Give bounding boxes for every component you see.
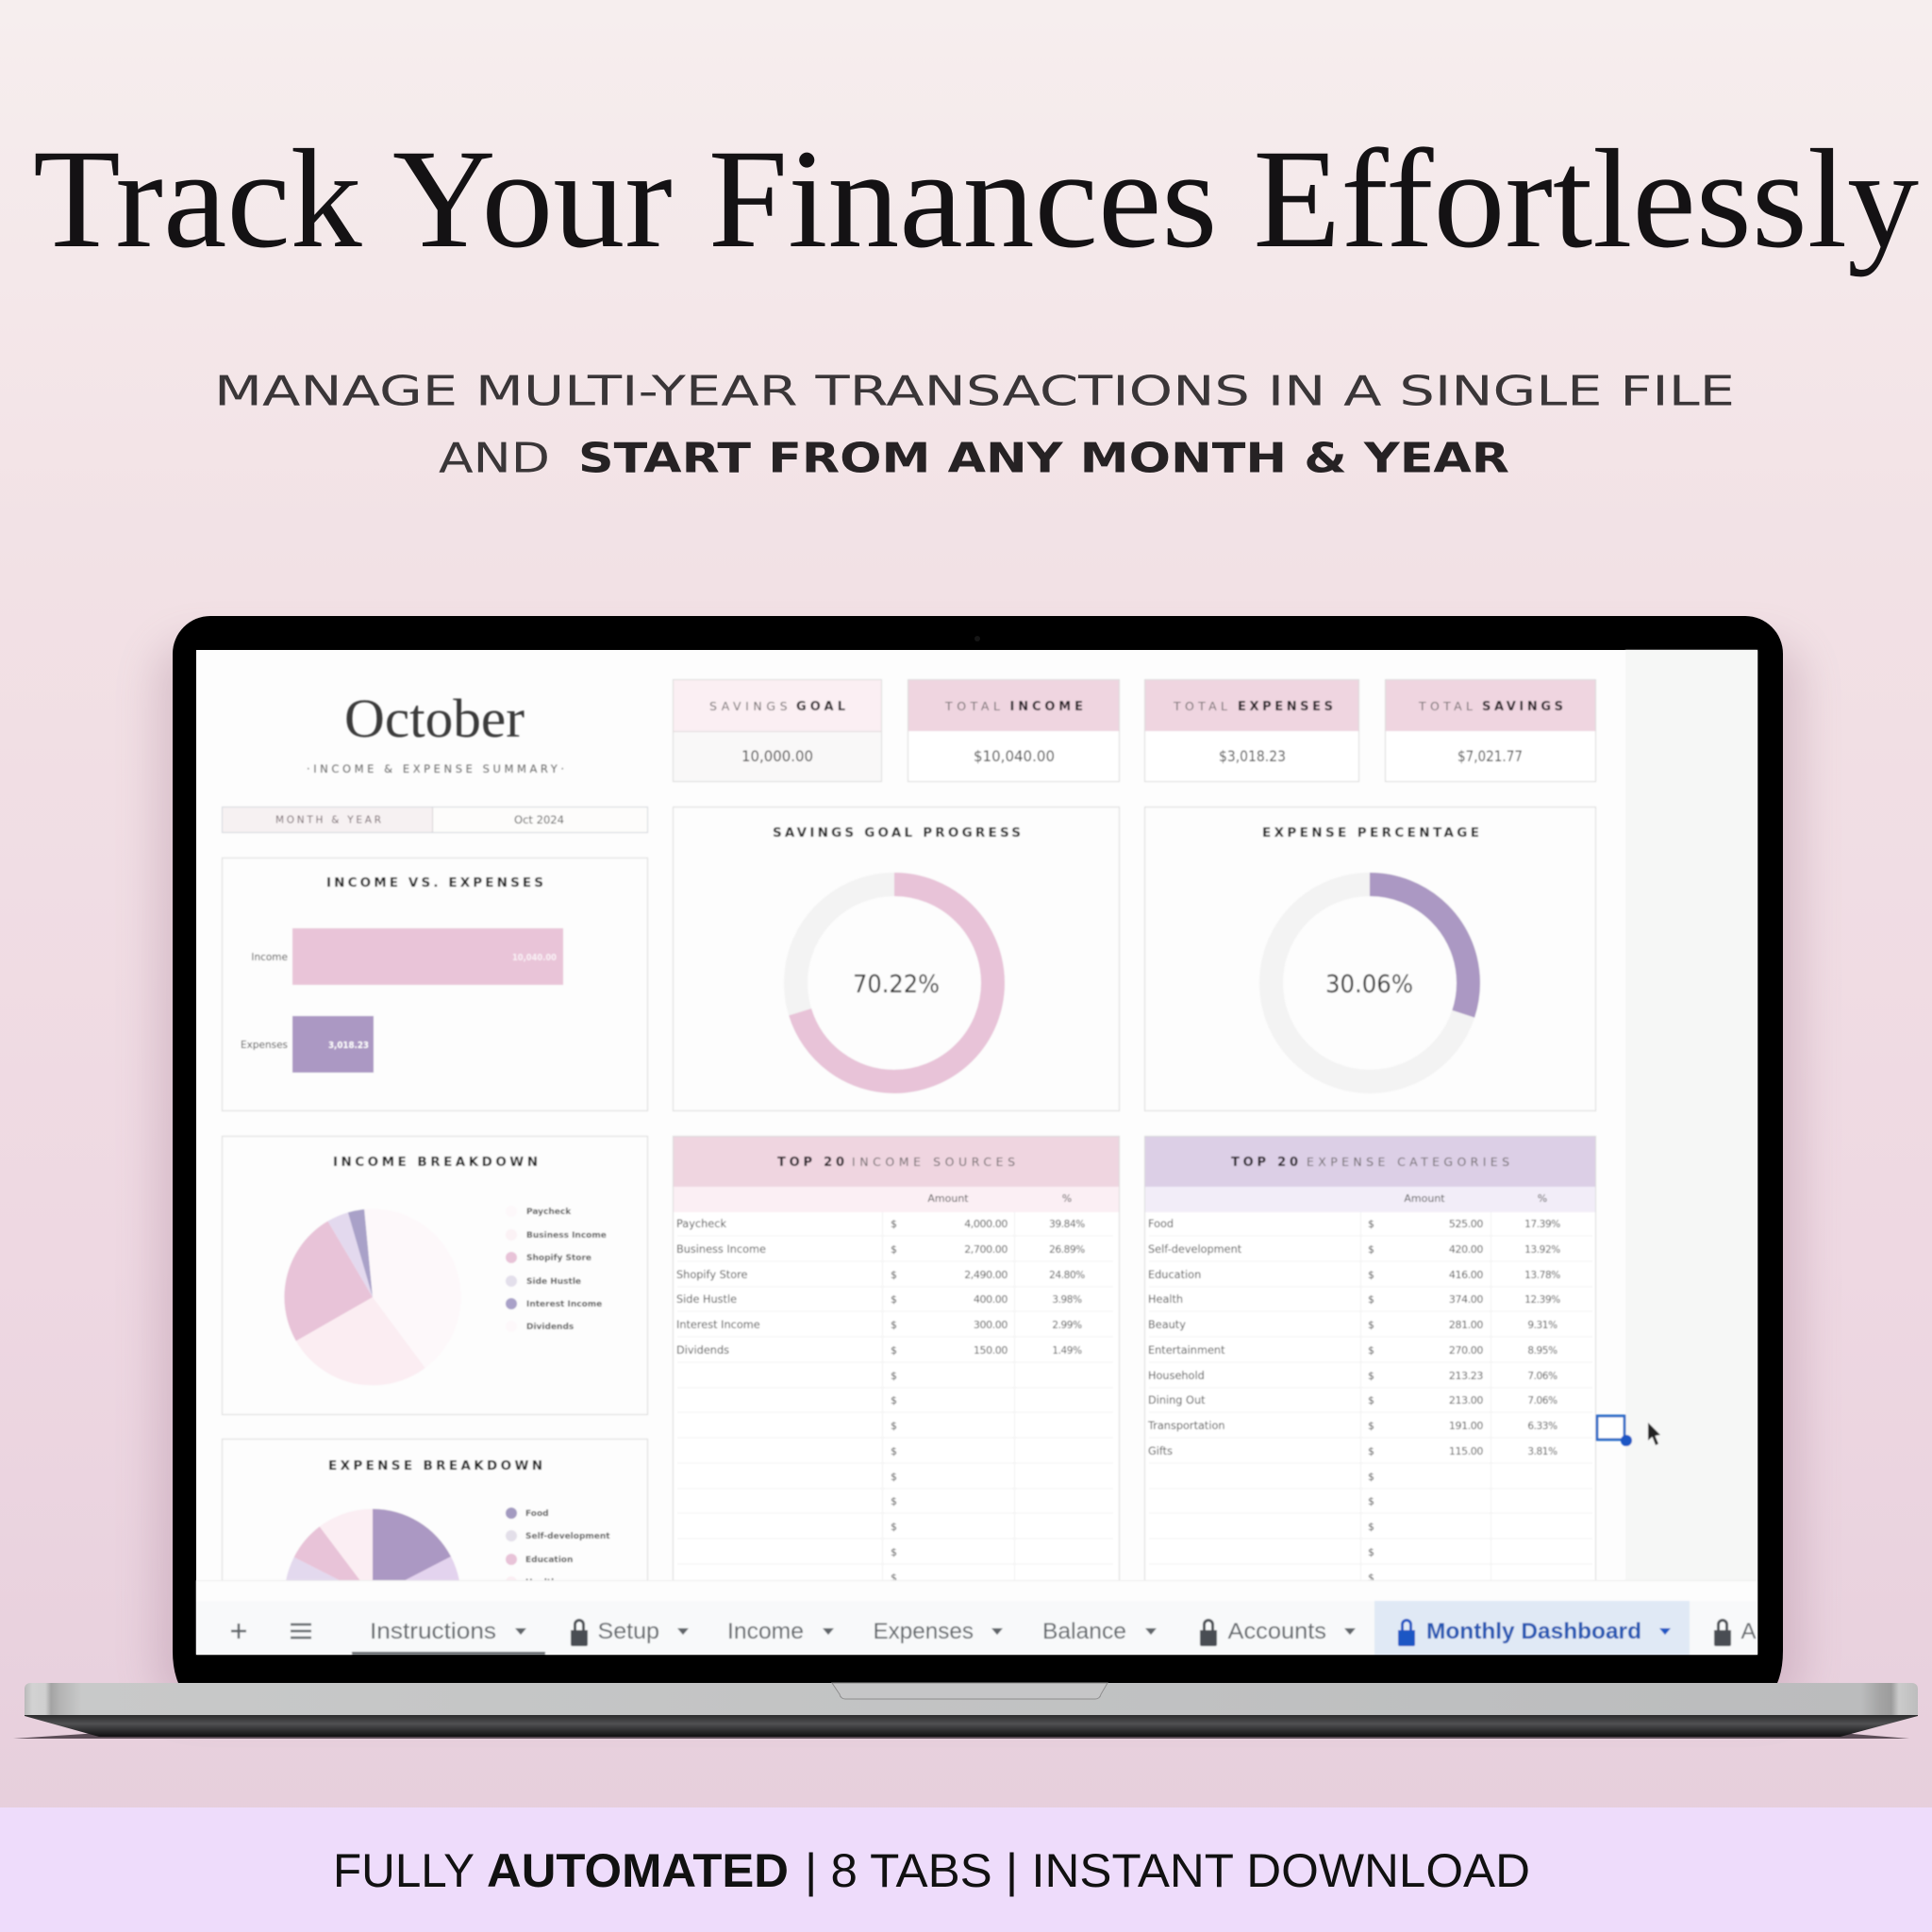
income rows: $ [891,1495,897,1507]
month heading [307,697,564,774]
table header [674,1137,1119,1187]
expense rows: $ [1368,1394,1374,1407]
expense rows: Transportation [1147,1420,1225,1432]
base ground shadow [13,1733,1909,1739]
income rows: 2.99% [1052,1320,1082,1331]
income rows: Interest Income [676,1319,760,1331]
expense rows: 191.00 [1449,1420,1483,1432]
legend: income: Interest Income [526,1300,602,1309]
expense rows: $ [1368,1218,1374,1230]
income rows: Dividends [676,1344,729,1357]
table: top 20 expense categories: EXPENSE CATEGORIES [1307,1155,1509,1169]
expense rows: Self-development [1148,1243,1242,1256]
expense rows: $ [1368,1370,1374,1382]
camera [974,636,980,641]
income rows: $ [891,1344,897,1357]
KPI card: total income: TOTAL [944,699,1000,713]
month and year selector: Oct 2024 [514,813,564,826]
legend: expenses: Education [525,1556,573,1565]
legend: income: Shopify Store [526,1254,591,1263]
expense rows: Health [1148,1293,1183,1306]
subtitle: START FROM ANY MONTH & YEAR [578,434,1509,483]
panel: savings goal progress [674,808,1119,1111]
tab: monthly dashboard (active): Monthly Dashboard [1426,1619,1641,1644]
tab: setup [571,1619,689,1646]
expense rows: 7.06% [1527,1395,1557,1407]
expense rows: $ [1368,1546,1374,1558]
KPI card: savings goal [674,679,881,781]
tab: instructions [352,1619,545,1655]
expense rows: 374.00 [1449,1293,1483,1306]
tab: setup: Setup [598,1619,659,1644]
income rows: 39.84% [1049,1219,1085,1230]
income rows: $ [891,1445,897,1457]
tab: monthly dashboard (active) [1374,1601,1690,1655]
panel: income breakdown [223,1136,647,1415]
expense rows [1147,1218,1560,1584]
tab: accounts [1200,1619,1356,1646]
expense rows: $ [1368,1495,1374,1507]
tab: clipped annual tab: A [1741,1619,1757,1644]
donut chart: 30.06% [1272,885,1468,1081]
KPI card: total expenses: $3,018.23 [1219,747,1286,765]
base notch [832,1683,1108,1699]
banner text: | 8 TABS | INSTANT DOWNLOAD [805,1844,1530,1897]
expense rows: 3.81% [1527,1446,1557,1457]
income rows: 1.49% [1052,1345,1082,1357]
income rows: $ [891,1471,897,1483]
income rows: $ [891,1269,897,1281]
KPI card: total expenses: TOTAL [1173,699,1227,713]
tab: clipped annual tab [1714,1619,1757,1646]
panel: income breakdown: INCOME BREAKDOWN [333,1155,538,1170]
income rows: 4,000.00 [964,1218,1008,1230]
panel: expense percentage: EXPENSE PERCENTAGE [1262,825,1479,841]
income rows: $ [891,1521,897,1533]
month heading: ·INCOME & EXPENSE SUMMARY· [307,762,564,775]
expense rows: 12.39% [1524,1294,1560,1306]
expense rows: 17.39% [1524,1219,1560,1230]
sheet tab bar [196,1580,1757,1655]
KPI card: total income: INCOME [1009,700,1083,714]
table: top 20 income sources: INCOME SOURCES [852,1155,1015,1169]
panel: income vs expenses [223,858,647,1111]
bar: expenses: 3,018.23 [328,1041,369,1051]
expense rows: $ [1368,1471,1374,1483]
income rows: $ [891,1218,897,1230]
table: top 20 income sources: TOP 20 [777,1156,844,1170]
tab: expenses: Expenses [874,1619,974,1644]
income rows: $ [891,1243,897,1256]
expense rows: $ [1368,1420,1374,1432]
expense rows: 281.00 [1449,1319,1483,1331]
bar: expenses [241,1016,374,1073]
expense rows: $ [1368,1344,1374,1357]
tab: income: Income [727,1619,804,1644]
expense rows: 7.06% [1527,1371,1557,1382]
expense rows: 115.00 [1449,1445,1483,1457]
panel: income vs expenses: INCOME VS. EXPENSES [326,875,543,891]
KPI card: total savings [1385,679,1596,781]
income rows: $ [891,1319,897,1331]
KPI card: total income: $10,040.00 [974,747,1055,765]
income rows [676,1218,1085,1584]
table: top 20 expense categories [1145,1136,1596,1598]
icon: add sheet [231,1624,246,1639]
KPI card: savings goal: GOAL [796,700,845,714]
expense rows: $ [1368,1293,1374,1306]
legend: income: Paycheck [526,1208,572,1217]
income rows: $ [891,1370,897,1382]
income rows: $ [891,1394,897,1407]
expense rows: 420.00 [1449,1243,1483,1256]
KPI card: total expenses: EXPENSES [1238,700,1333,714]
icon: all sheets menu [291,1624,311,1638]
donut chart: 70.22% [796,885,992,1081]
screen [196,650,1757,1655]
expense rows: 13.78% [1524,1270,1560,1281]
month and year selector [223,808,647,832]
legend: expenses [506,1507,610,1588]
expense rows: 6.33% [1527,1421,1557,1432]
KPI card: total savings: $7,021.77 [1457,747,1523,765]
table: top 20 income sources [674,1136,1119,1598]
expense rows: 9.31% [1527,1320,1557,1331]
expense rows: 270.00 [1449,1344,1483,1357]
expense rows: 213.23 [1449,1370,1483,1382]
expense rows: $ [1368,1572,1374,1584]
income rows: 150.00 [974,1344,1008,1357]
bar: expenses: Expenses [241,1040,288,1051]
income rows: 24.80% [1049,1270,1085,1281]
laptop mockup [13,616,1918,1739]
right empty sheet area [1625,650,1757,1580]
month and year selector: MONTH & YEAR [275,815,381,826]
expense rows: Gifts [1148,1445,1173,1457]
subtitle [214,368,1735,483]
KPI card: total income [908,679,1119,781]
bar: income [251,928,563,985]
income rows: $ [891,1572,897,1584]
panel: expense breakdown: EXPENSE BREAKDOWN [328,1458,542,1474]
laptop shadow [156,641,1802,1707]
income rows: Paycheck [676,1218,726,1230]
expense rows: 213.00 [1449,1394,1483,1407]
expense rows: $ [1368,1269,1374,1281]
legend: income [506,1206,607,1332]
tab: income [727,1619,834,1644]
banner text: AUTOMATED [487,1844,789,1897]
pie chart: expenses [286,1507,459,1581]
KPI card: savings goal: 10,000.00 [741,747,813,765]
subtitle: MANAGE MULTI-YEAR TRANSACTIONS IN A SINGLE FILE [214,368,1735,415]
expense rows: 416.00 [1449,1269,1483,1281]
income rows: 300.00 [974,1319,1008,1331]
banner text: FULLY [333,1844,475,1897]
expense rows: $ [1368,1319,1374,1331]
table: top 20 income sources: Amount [927,1192,969,1205]
income rows: $ [891,1420,897,1432]
income rows: 26.89% [1049,1244,1085,1256]
legend: expenses: Health [525,1578,558,1588]
KPI card: total savings: SAVINGS [1482,700,1563,714]
expense rows: $ [1368,1243,1374,1256]
expense rows: 13.92% [1524,1244,1560,1256]
bar: income: 10,040.00 [512,953,557,963]
income rows: Business Income [676,1243,766,1256]
KPI card: total expenses [1145,679,1358,781]
pie chart: income [283,1208,425,1385]
expense rows: 8.95% [1527,1345,1557,1357]
tab: balance: Balance [1042,1619,1126,1644]
legend: income: Business Income [526,1231,607,1241]
table header [1145,1137,1595,1187]
panel: expense percentage [1145,808,1596,1111]
KPI card: total savings: TOTAL [1418,699,1473,713]
laptop bezel [173,616,1783,1683]
income rows: 400.00 [974,1293,1008,1306]
income rows: Side Hustle [676,1293,737,1306]
subtitle: AND [439,434,550,483]
expense rows: Household [1148,1370,1205,1382]
panel: expense breakdown [221,1438,649,1581]
income rows: $ [891,1546,897,1558]
income rows: 2,490.00 [964,1269,1008,1281]
expense rows: $ [1368,1445,1374,1457]
expense rows: Entertainment [1148,1344,1225,1357]
expense rows: Food [1148,1218,1174,1230]
table: top 20 expense categories: Amount [1404,1192,1445,1205]
bar: income: Income [251,952,288,963]
laptop base [13,1683,1918,1739]
table: top 20 expense categories: % [1538,1192,1547,1205]
table: top 20 expense categories: TOP 20 [1231,1156,1298,1170]
income rows: 2,700.00 [964,1243,1008,1256]
cell selection box [1597,1416,1632,1446]
legend: expenses: Food [525,1509,549,1519]
expense rows: Beauty [1148,1319,1186,1331]
legend: income: Side Hustle [526,1277,581,1287]
bottom banner [0,1807,1932,1932]
legend: expenses: Self-development [525,1532,610,1541]
base top [25,1683,1918,1715]
banner text [333,1844,1530,1897]
icon: mouse cursor [1648,1423,1660,1445]
base underside [25,1713,1918,1737]
sheet content [223,650,1757,1685]
table: top 20 income sources: % [1062,1192,1072,1205]
title: Track Your Finances Effortlessly [33,121,1919,277]
expense rows: Dining Out [1148,1394,1206,1407]
dashboard screen content [196,650,1757,1685]
income rows: Shopify Store [676,1269,748,1281]
donut chart: 30.06%: 30.06% [1325,971,1413,999]
expense rows: Education [1148,1269,1201,1281]
expense rows: $ [1368,1521,1374,1533]
KPI card: savings goal: SAVINGS [709,699,788,713]
tab: instructions: Instructions [370,1619,496,1644]
expense rows: 525.00 [1449,1218,1483,1230]
income rows: 3.98% [1052,1294,1082,1306]
legend: income: Dividends [526,1323,574,1332]
income rows: $ [891,1293,897,1306]
panel: savings goal progress: SAVINGS GOAL PROGRESS [773,825,1021,841]
tab: accounts: Accounts [1228,1619,1326,1644]
month heading: October [344,688,525,749]
donut chart: 70.22%: 70.22% [853,971,940,999]
